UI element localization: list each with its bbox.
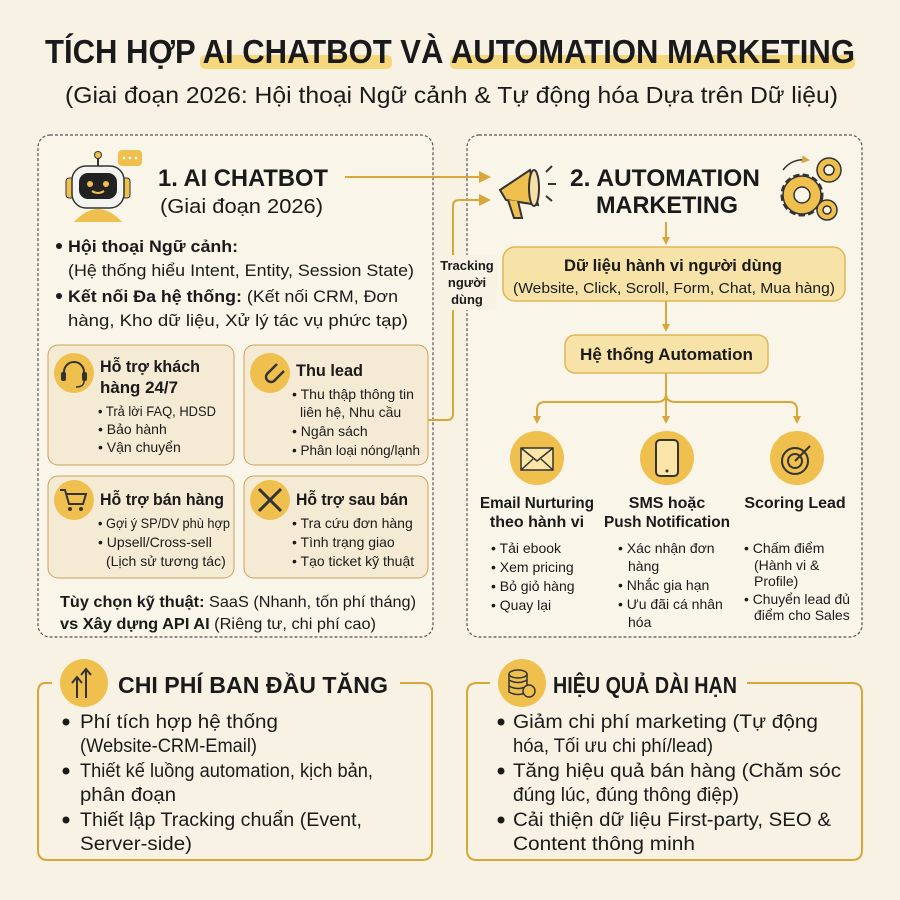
column: scoring lead: (Hành vi &	[754, 557, 820, 573]
column: email nurturing: theo hành vi	[490, 514, 584, 531]
column: scoring lead	[744, 495, 850, 623]
list: benefits: Cải thiện dữ liệu First-party, SEO &	[513, 810, 831, 831]
icon: megaphone	[500, 166, 556, 218]
panel: initial cost	[38, 659, 432, 860]
list: costs: Thiết lập Tracking chuẩn (Event,	[80, 810, 362, 831]
heading: automation marketing	[570, 165, 760, 219]
card: sales support: • Upsell/Cross-sell	[98, 534, 212, 550]
heading: AI chatbot: (Giai đoạn 2026)	[160, 196, 323, 218]
box: user behavior data	[503, 247, 845, 301]
column: email nurturing: • Tải ebook	[491, 540, 562, 556]
column: SMS: • Ưu đãi cá nhân	[618, 596, 723, 612]
subtitle: (Giai đoạn 2026: Hội thoại Ngữ cảnh & Tự động hóa Dựa trên Dữ liệu)	[65, 82, 838, 108]
text block: features: Kết nối Đa hệ thống: (Kết nối CRM, Đơn	[68, 287, 398, 306]
card: after-sales support: • Tình trạng giao	[292, 534, 395, 550]
heading: AI chatbot: 1. AI CHATBOT	[158, 165, 328, 192]
card: customer support	[48, 345, 234, 465]
list: benefits: Giảm chi phí marketing (Tự động	[513, 712, 818, 733]
arrow: chatbot to automation	[345, 176, 488, 178]
icon: rising arrows	[60, 659, 108, 707]
arrow: tracking	[428, 200, 488, 420]
card: lead capture	[244, 345, 428, 465]
card: sales support: (Lịch sử tương tác)	[106, 553, 226, 569]
box: automation system: Hệ thống Automation	[580, 345, 753, 364]
card: lead capture: Thu lead	[296, 361, 363, 380]
card: lead capture: • Phân loại nóng/lạnh	[292, 442, 420, 458]
column: scoring lead: • Chấm điểm	[744, 540, 824, 556]
text block: features: hàng, Kho dữ liệu, Xử lý tác vụ phức tạp)	[68, 311, 408, 330]
list: costs: phân đoạn	[80, 785, 176, 806]
column: scoring lead: • Chuyển lead đủ	[744, 591, 850, 607]
column: SMS: hóa	[628, 614, 652, 630]
text block: features: Hội thoại Ngữ cảnh:	[68, 237, 238, 256]
icon: target	[770, 431, 824, 485]
column: email nurturing: • Xem pricing	[491, 559, 574, 575]
column: SMS: Push Notification	[604, 514, 730, 531]
column: scoring lead: Scoring Lead	[744, 495, 846, 512]
card: after-sales support	[244, 476, 428, 578]
icon: robot	[66, 150, 142, 222]
list: costs	[62, 712, 373, 855]
label: tracking: Tracking	[440, 258, 494, 273]
column: email nurturing: • Bỏ giỏ hàng	[491, 578, 575, 594]
card: customer support: • Bảo hành	[98, 421, 167, 437]
column: email nurturing	[480, 495, 594, 613]
text block: technical options: Tùy chọn kỹ thuật: SaaS (Nhanh, tốn phí tháng)	[60, 594, 416, 611]
column: SMS: • Xác nhận đơn	[618, 540, 715, 556]
card: sales support: Hỗ trợ bán hàng	[100, 490, 224, 509]
card: after-sales support: • Tra cứu đơn hàng	[292, 515, 413, 531]
icon: gears	[783, 158, 841, 220]
label: tracking: người	[448, 275, 486, 290]
box: user behavior data: (Website, Click, Scroll, Form, Chat, Mua hàng)	[513, 280, 835, 297]
list: costs: Server-side)	[80, 834, 192, 855]
title: TÍCH HỢP AI CHATBOT VÀ AUTOMATION MARKETING	[45, 33, 855, 70]
panel: long-term effectiveness	[467, 659, 862, 860]
list: costs: Thiết kế luồng automation, kịch bản,	[80, 761, 373, 782]
list: benefits: Tăng hiệu quả bán hàng (Chăm sóc	[513, 761, 841, 782]
panel: initial cost: CHI PHÍ BAN ĐẦU TĂNG	[118, 671, 388, 698]
heading: AI chatbot	[158, 165, 328, 218]
list: benefits: Content thông minh	[513, 834, 695, 855]
list: benefits	[498, 712, 841, 855]
box: automation system	[565, 335, 768, 373]
column: scoring lead: điểm cho Sales	[754, 607, 850, 623]
card: sales support	[48, 476, 234, 578]
text block: features: (Hệ thống hiểu Intent, Entity, Session State)	[68, 261, 414, 280]
heading: automation marketing: 2. AUTOMATION	[570, 165, 760, 192]
list: costs: Phí tích hợp hệ thống	[80, 712, 278, 733]
card: customer support: • Vận chuyển	[98, 439, 181, 455]
card: customer support: hàng 24/7	[100, 378, 178, 397]
icon: phone	[640, 431, 694, 485]
card: lead capture: liên hệ, Nhu cầu	[300, 404, 401, 420]
panel: AI chatbot	[38, 135, 433, 637]
card: after-sales support: Hỗ trợ sau bán	[296, 490, 408, 509]
card: sales support: • Gợi ý SP/DV phù hợp	[98, 515, 230, 531]
column: email nurturing: Email Nurturing	[480, 495, 594, 512]
box: user behavior data: Dữ liệu hành vi người dùng	[564, 256, 782, 275]
card: customer support: Hỗ trợ khách	[100, 357, 200, 376]
heading: automation marketing: MARKETING	[596, 192, 738, 219]
arrows: branches	[537, 373, 797, 422]
column: SMS: SMS hoặc	[629, 495, 705, 512]
label: tracking	[437, 255, 497, 310]
list: benefits: đúng lúc, đúng thông điệp)	[513, 785, 739, 806]
text block: technical options: vs Xây dựng API AI (Riêng tư, chi phí cao)	[60, 616, 376, 633]
text block: technical options	[60, 594, 416, 633]
list: costs: (Website-CRM-Email)	[80, 736, 257, 757]
column: SMS: • Nhắc gia hạn	[618, 577, 709, 593]
column: SMS	[604, 495, 730, 630]
label: tracking: dùng	[451, 292, 483, 307]
card: after-sales support: • Tạo ticket kỹ thuật	[292, 553, 414, 569]
card: lead capture: • Thu thập thông tin	[292, 386, 414, 402]
column: SMS: hàng	[628, 558, 659, 574]
column: email nurturing: • Quay lại	[491, 597, 551, 613]
card: customer support: • Trả lời FAQ, HDSD	[98, 403, 216, 419]
panel: automation marketing	[467, 135, 862, 637]
icon: coins	[498, 659, 546, 707]
list: benefits: hóa, Tối ưu chi phí/lead)	[513, 736, 713, 757]
column: scoring lead: Profile)	[754, 573, 798, 589]
text block: features	[56, 237, 414, 330]
panel: long-term effectiveness: HIỆU QUẢ DÀI HẠN	[553, 670, 737, 698]
card: lead capture: • Ngân sách	[292, 423, 368, 439]
icon: email	[510, 431, 564, 485]
